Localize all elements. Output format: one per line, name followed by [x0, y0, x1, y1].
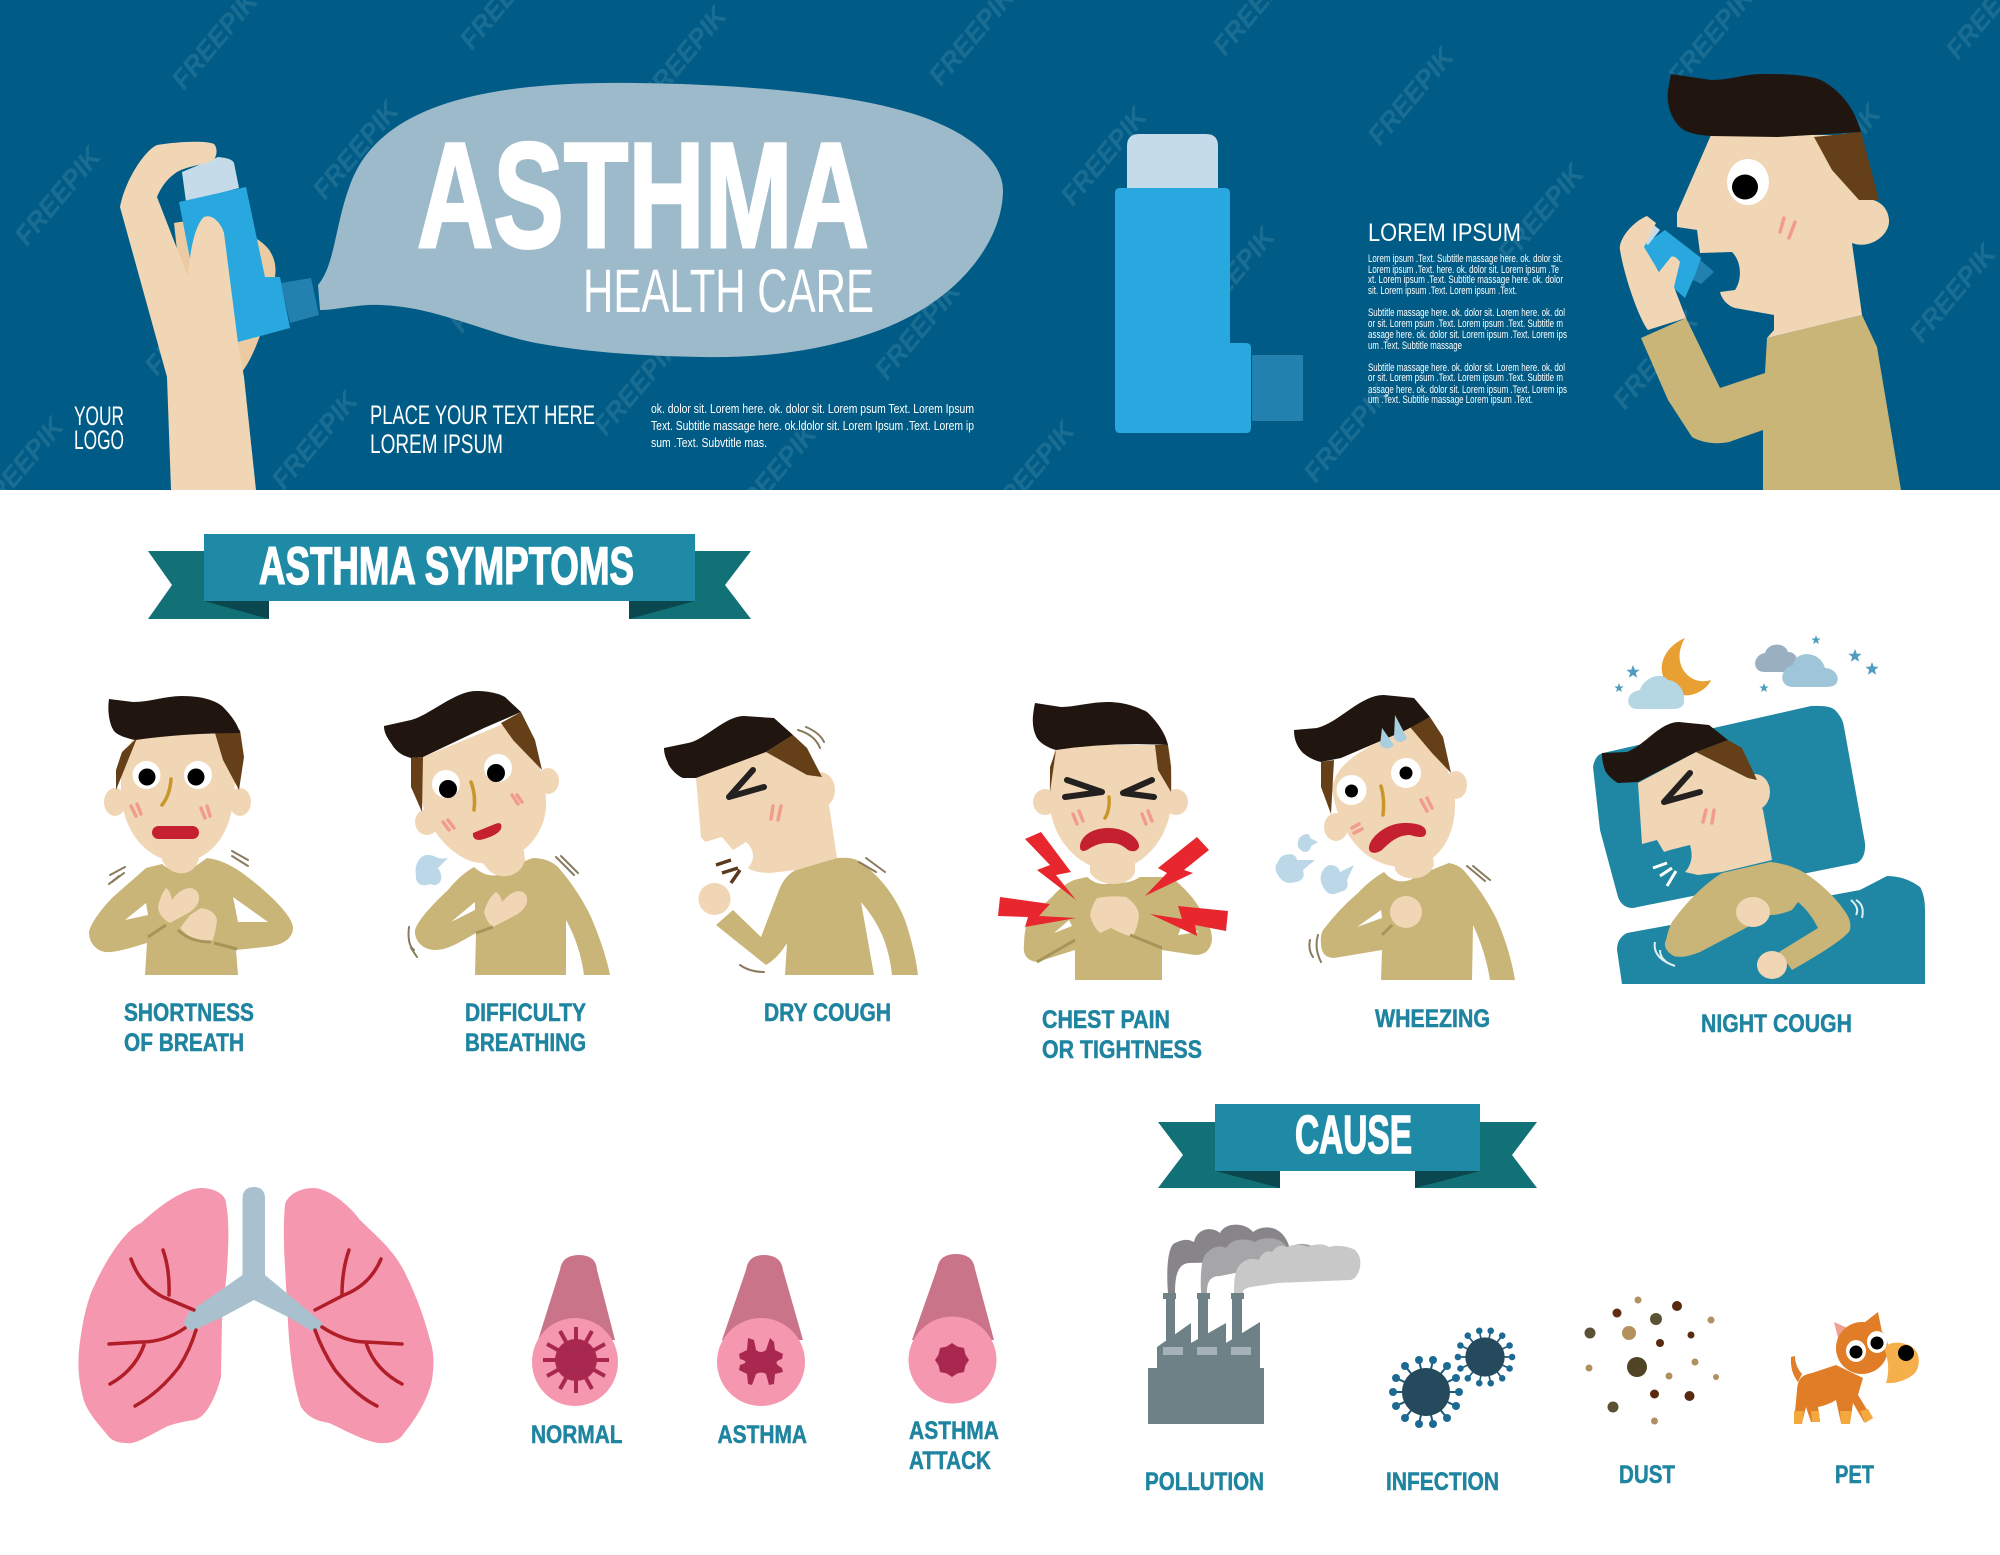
watermarks: FREEPIK [307, 94, 406, 205]
subtitle: HEALTH CARE [583, 257, 874, 325]
body text: header right: assage here. ok. dolor sit. Lorem ipsum .Text. Lorem ips [1368, 384, 1567, 396]
icon: hand holding inhaler [120, 142, 319, 490]
label: infection: INFECTION [1386, 1468, 1499, 1496]
body text: header left: sum .Text. Subvtitle mas. [651, 435, 767, 450]
watermarks: FREEPIK [1055, 100, 1154, 211]
airway: asthma [717, 1255, 805, 1406]
icon: dust particles [1584, 1296, 1719, 1424]
moon [1662, 638, 1711, 695]
banner: cause [1158, 1104, 1537, 1188]
pillow [1593, 706, 1865, 908]
symptom figure: dry cough [664, 716, 918, 975]
body text: header right: Lorem ipsum .Text. Subtitle massage here. ok. dolor sit. [1368, 253, 1563, 265]
header band [0, 0, 2000, 490]
body text: header right: um .Text. Subtitle massage [1368, 340, 1462, 352]
watermarks: FREEPIK [1758, 404, 1857, 515]
watermarks: FREEPIK [725, 417, 824, 528]
watermarks: FREEPIK [1904, 237, 2000, 348]
label: asthma: ASTHMA [718, 1421, 807, 1449]
watermarks: FREEPIK [1362, 40, 1461, 151]
symptom figure: night cough [1593, 635, 1925, 984]
banner title: CAUSE [1295, 1105, 1412, 1165]
label: asthma attack: ATTACK [909, 1447, 991, 1475]
watermarks: FREEPIK [749, 184, 848, 295]
watermarks: FREEPIK [444, 227, 543, 338]
figure: man using inhaler [1620, 74, 1901, 490]
symptom figure: difficulty breathing [384, 691, 610, 975]
logo text: LOGO [74, 425, 124, 455]
symptom figure: wheezing [1275, 695, 1515, 980]
icon: factory pollution [1148, 1225, 1360, 1424]
label: normal: NORMAL [531, 1421, 622, 1449]
breath puffs [1275, 834, 1354, 894]
body text: header right: Lorem ipsum .Text. here. ok. dolor sit. Lorem ipsum .Te [1368, 264, 1559, 276]
title: ASTHMA [417, 111, 869, 279]
label: wheezing: WHEEZING [1375, 1005, 1490, 1033]
watermarks: FREEPIK [266, 384, 365, 495]
body text: header right: or sit. Lorem psum .Text. Lorem ipsum .Text. Subtitle m [1368, 372, 1563, 384]
body text: header right: sit. Lorem ipsum .Text. Lorem ipsum .Text. [1368, 285, 1517, 297]
watermarks: FREEPIK [1492, 157, 1591, 268]
label: shortness of breath: SHORTNESS [124, 999, 254, 1027]
watermarks: FREEPIK [1607, 304, 1706, 415]
speech bubble [318, 83, 1003, 357]
body text: header right: um .Text. Subtitle massage Lorem ipsum .Text. [1368, 394, 1533, 406]
label: chest pain or tightness: CHEST PAIN [1042, 1006, 1170, 1034]
symptom figure: chest pain or tightness [998, 702, 1228, 980]
label: night cough: NIGHT COUGH [1701, 1010, 1852, 1038]
stars [1614, 635, 1879, 692]
airway: asthma attack [908, 1254, 996, 1404]
label: pollution: POLLUTION [1145, 1468, 1264, 1496]
watermarks: FREEPIK [635, 0, 734, 110]
body text: header right: or sit. Lorem psum .Text. Lorem ipsum .Text. Subtitle m [1368, 318, 1563, 330]
banner title: ASTHMA SYMPTOMS [259, 537, 634, 596]
watermarks: FREEPIK [9, 140, 108, 251]
label: difficulty breathing: DIFFICULTY [465, 999, 586, 1027]
icon: infection viruses [1389, 1327, 1515, 1428]
headline placeholder: LOREM IPSUM [370, 429, 503, 459]
watermarks: FREEPIK [1298, 377, 1397, 488]
label: dry cough: DRY COUGH [764, 999, 891, 1027]
label: pet: PET [1835, 1461, 1874, 1489]
watermarks: FREEPIK [139, 270, 238, 381]
watermarks: FREEPIK [869, 274, 968, 385]
icon: large inhaler [1115, 134, 1303, 433]
airway: normal [532, 1255, 618, 1406]
heading: lorem ipsum: LOREM IPSUM [1368, 219, 1521, 247]
body text: header right: Subtitle massage here. ok. dolor sit. Lorem here. ok. dol [1368, 362, 1565, 374]
label: dust: DUST [1619, 1461, 1675, 1489]
label: chest pain or tightness: OR TIGHTNESS [1042, 1036, 1202, 1064]
icon: pet dog [1791, 1312, 1919, 1424]
body text: header left: ok. dolor sit. Lorem here. ok. dolor sit. Lorem psum Text. Lorem Ipsum [651, 401, 974, 416]
logo text: YOUR [74, 401, 124, 431]
body text: header right: xt. Lorem ipsum .Text. Subtitle massage here. ok. dolor [1368, 274, 1563, 286]
watermarks [0, 0, 2000, 528]
label: difficulty breathing: BREATHING [465, 1029, 586, 1057]
night clouds [1628, 645, 1838, 709]
watermarks: FREEPIK [1183, 220, 1282, 331]
label: shortness of breath: OF BREATH [124, 1029, 244, 1057]
bed [1617, 876, 1925, 984]
illustration: lungs [78, 1187, 433, 1443]
headline placeholder: PLACE YOUR TEXT HERE [370, 400, 595, 430]
body text: header left: Text. Subtitle massage here. ok.ldolor sit. Lorem Ipsum .Text. Lorem ip [651, 418, 974, 433]
watermarks: FREEPIK [983, 414, 1082, 525]
label: asthma attack: ASTHMA [909, 1417, 999, 1445]
watermarks: FREEPIK [1789, 97, 1888, 208]
body text: header right: Subtitle massage here. ok. dolor sit. Lorem here. ok. dol [1368, 307, 1565, 319]
watermarks: FREEPIK [588, 330, 687, 441]
lightning bolts [998, 832, 1228, 936]
body text: header right: assage here. ok. dolor sit. Lorem ipsum .Text. Lorem ips [1368, 329, 1567, 341]
symptom figure: shortness of breath [89, 696, 293, 975]
banner: asthma symptoms [148, 534, 751, 619]
